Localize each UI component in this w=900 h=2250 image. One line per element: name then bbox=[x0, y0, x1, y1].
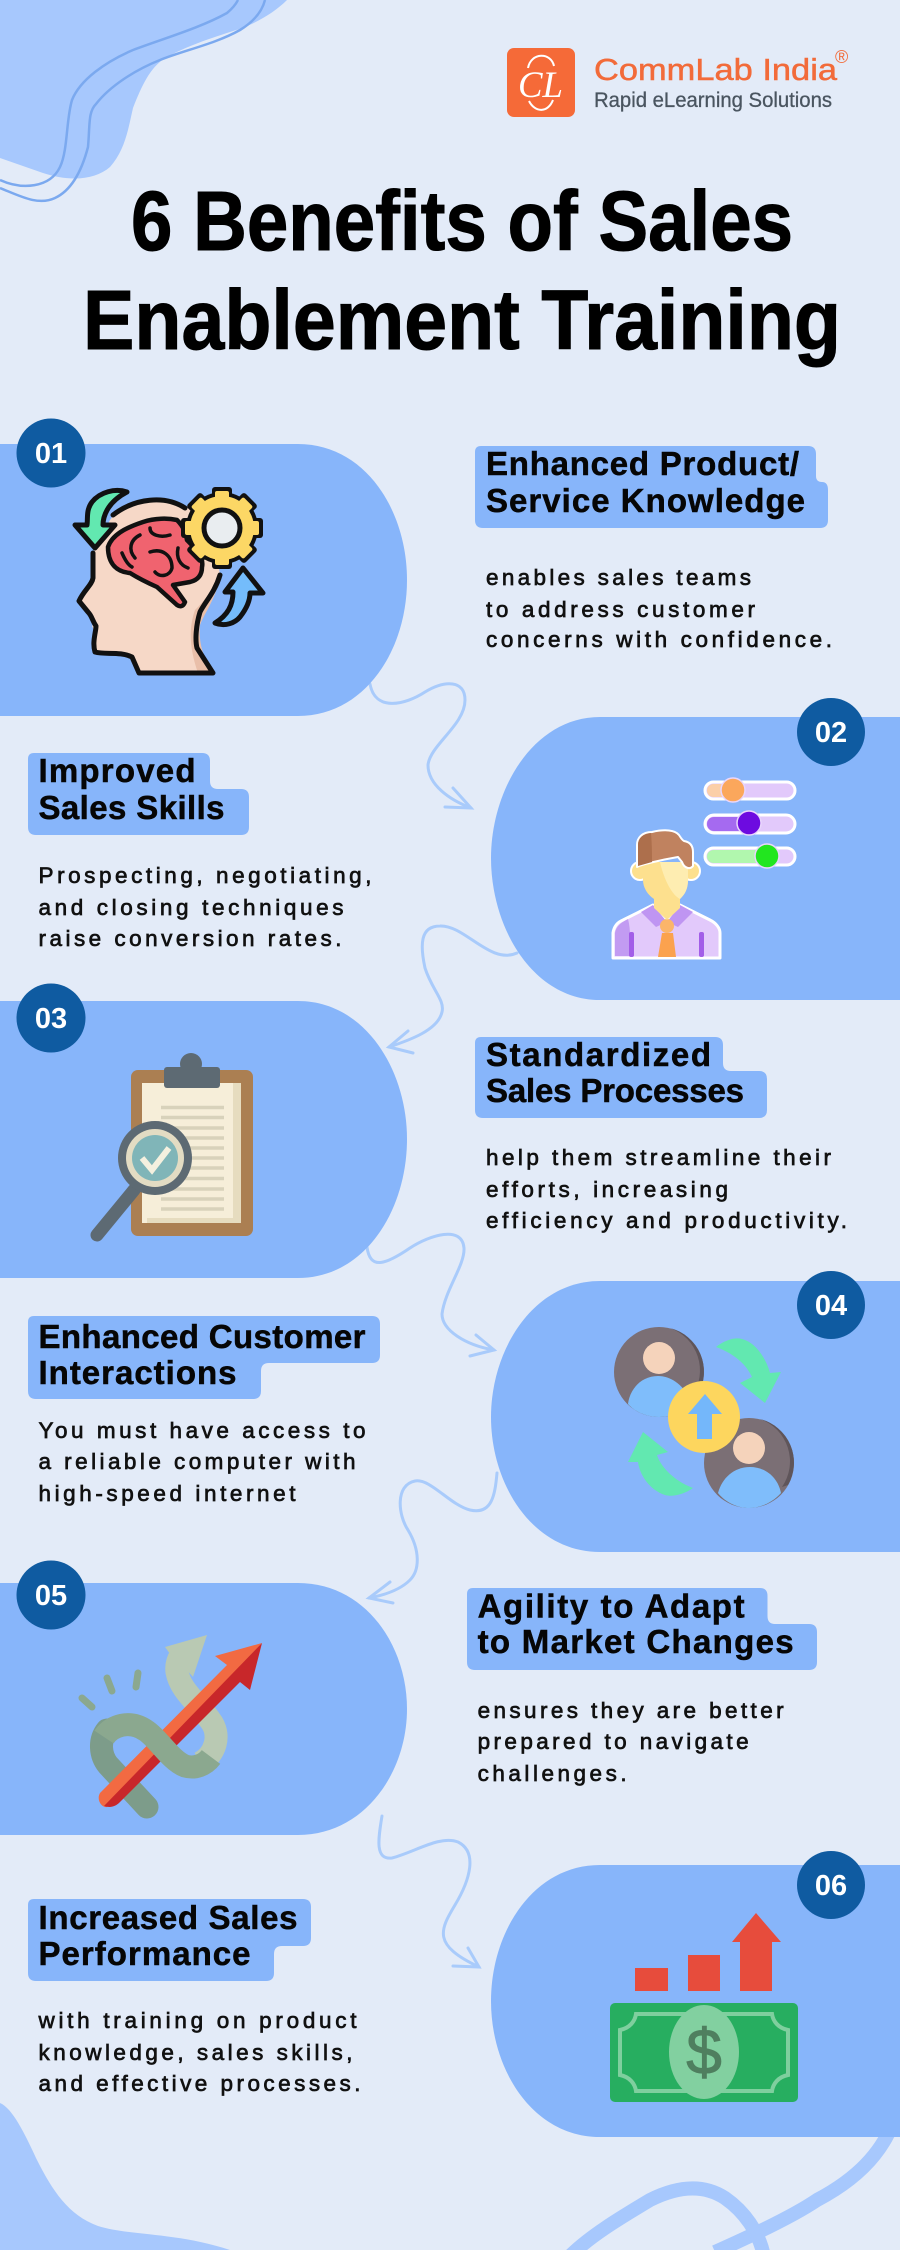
heading 04: Enhanced Customer bbox=[38, 1318, 366, 1355]
heading 06: Performance bbox=[38, 1935, 250, 1972]
icon: person with sliders bbox=[613, 778, 795, 958]
heading 04: Interactions bbox=[38, 1354, 236, 1391]
body 06 bbox=[38, 2008, 360, 2096]
panel background 01 bbox=[0, 444, 407, 716]
heading 06: Increased Sales bbox=[38, 1899, 298, 1936]
logo wordmark: CommLab India bbox=[594, 52, 838, 87]
panel background 02 bbox=[491, 717, 900, 1000]
number badge 06: 06 bbox=[815, 1870, 847, 1902]
number badge 04 bbox=[797, 1271, 865, 1339]
body 04: a reliable computer with bbox=[38, 1449, 356, 1474]
number badge 05: 05 bbox=[35, 1580, 67, 1612]
number badge 04: 04 bbox=[815, 1290, 847, 1322]
body 01: concerns with confidence. bbox=[486, 627, 832, 652]
icon: red arrow through loop bbox=[82, 1635, 262, 1807]
panel background 04 bbox=[491, 1281, 900, 1552]
logo mark bbox=[507, 48, 575, 117]
number badge 06 bbox=[797, 1851, 865, 1919]
heading 05: Agility to Adapt bbox=[478, 1588, 745, 1624]
heading tag 02 bbox=[28, 753, 249, 835]
panel background 03 bbox=[0, 1001, 407, 1278]
number badge 01 bbox=[16, 418, 86, 488]
panel 04: customer interactions bbox=[491, 1271, 900, 1552]
heading 05 bbox=[478, 1588, 794, 1660]
number badge 01: 01 bbox=[35, 438, 67, 470]
body 04 bbox=[38, 1418, 366, 1506]
body 05 bbox=[478, 1698, 784, 1786]
icon: head with brain and gear bbox=[75, 487, 263, 673]
panel background 05 bbox=[0, 1583, 407, 1835]
panel 01: enhanced knowledge bbox=[0, 418, 407, 716]
text block 04 bbox=[28, 1316, 380, 1506]
body 04: high-speed internet bbox=[38, 1481, 296, 1506]
title: Enablement Training bbox=[83, 273, 841, 367]
connector arrow 3 to 4 bbox=[367, 1234, 494, 1356]
text block 03 bbox=[475, 1036, 847, 1233]
body 01: enables sales teams bbox=[486, 565, 751, 590]
number badge 03 bbox=[16, 984, 86, 1052]
heading 01: Service Knowledge bbox=[486, 482, 805, 519]
heading 02 bbox=[38, 752, 224, 826]
body 02: raise conversion rates. bbox=[38, 926, 342, 951]
decorative blob: top left bbox=[0, 0, 287, 201]
body 04: You must have access to bbox=[38, 1418, 366, 1443]
body 03: efforts, increasing bbox=[486, 1177, 728, 1202]
icon: clipboard with magnifier bbox=[97, 1053, 253, 1236]
icon: people exchange bbox=[614, 1327, 794, 1508]
panel 05: agility bbox=[0, 1560, 407, 1835]
heading 04 bbox=[38, 1318, 366, 1391]
text block 05 bbox=[467, 1588, 817, 1786]
title bbox=[83, 174, 841, 367]
connector arrow 2 to 3 bbox=[389, 926, 517, 1053]
decorative lines: bottom right bbox=[570, 2125, 892, 2250]
decorative blob: bottom left bbox=[0, 2103, 230, 2250]
connector arrow 1 to 2 bbox=[370, 684, 471, 808]
logo bbox=[507, 47, 848, 117]
body 02: Prospecting, negotiating, bbox=[38, 863, 372, 888]
connector arrow 5 to 6 bbox=[379, 1816, 479, 1967]
logo tagline: Rapid eLearning Solutions bbox=[594, 89, 832, 112]
body 06: and effective processes. bbox=[38, 2071, 360, 2096]
heading tag 01 bbox=[475, 446, 828, 528]
number badge 02: 02 bbox=[815, 717, 847, 749]
heading tag 06 bbox=[28, 1899, 311, 1981]
icon: money with growth bars bbox=[610, 1913, 798, 2102]
body 01: to address customer bbox=[486, 597, 756, 622]
panel 03: standardized processes bbox=[0, 984, 407, 1278]
body 02 bbox=[38, 863, 372, 951]
icon: money with growth bars: $ bbox=[686, 2016, 722, 2088]
body 03 bbox=[486, 1145, 847, 1233]
logo mark: CL bbox=[518, 65, 563, 106]
heading 02: Sales Skills bbox=[38, 789, 224, 826]
heading tag 05 bbox=[467, 1588, 817, 1670]
text block 01 bbox=[475, 445, 832, 652]
number badge 02 bbox=[797, 698, 865, 766]
body 02: and closing techniques bbox=[38, 895, 344, 920]
registered mark: ® bbox=[835, 47, 848, 67]
body 05: challenges. bbox=[478, 1761, 627, 1786]
heading 01: Enhanced Product/ bbox=[486, 445, 799, 482]
heading 02: Improved bbox=[38, 752, 196, 789]
heading tag 03 bbox=[475, 1037, 767, 1118]
panel 02: improved sales skills bbox=[491, 698, 900, 1000]
heading 01 bbox=[486, 445, 805, 519]
body 03: help them streamline their bbox=[486, 1145, 832, 1170]
heading 03 bbox=[486, 1036, 744, 1109]
connector arrow 4 to 5 bbox=[369, 1473, 497, 1603]
title: 6 Benefits of Sales bbox=[131, 174, 793, 268]
heading 03: Standardized bbox=[486, 1036, 711, 1073]
panel 06: increased performance bbox=[491, 1851, 900, 2137]
body 05: ensures they are better bbox=[478, 1698, 784, 1723]
heading 05: to Market Changes bbox=[478, 1623, 794, 1660]
heading 06 bbox=[38, 1899, 298, 1972]
text block 06 bbox=[28, 1899, 360, 2096]
body 05: prepared to navigate bbox=[478, 1729, 749, 1754]
body 01 bbox=[486, 565, 832, 652]
heading tag 04 bbox=[28, 1316, 380, 1399]
heading 03: Sales Processes bbox=[486, 1072, 744, 1109]
text block 02 bbox=[28, 752, 372, 951]
body 06: with training on product bbox=[38, 2008, 357, 2033]
panel background 06 bbox=[491, 1865, 900, 2137]
body 06: knowledge, sales skills, bbox=[38, 2040, 353, 2065]
number badge 05 bbox=[16, 1560, 86, 1630]
body 03: efficiency and productivity. bbox=[486, 1208, 847, 1233]
number badge 03: 03 bbox=[35, 1003, 67, 1035]
